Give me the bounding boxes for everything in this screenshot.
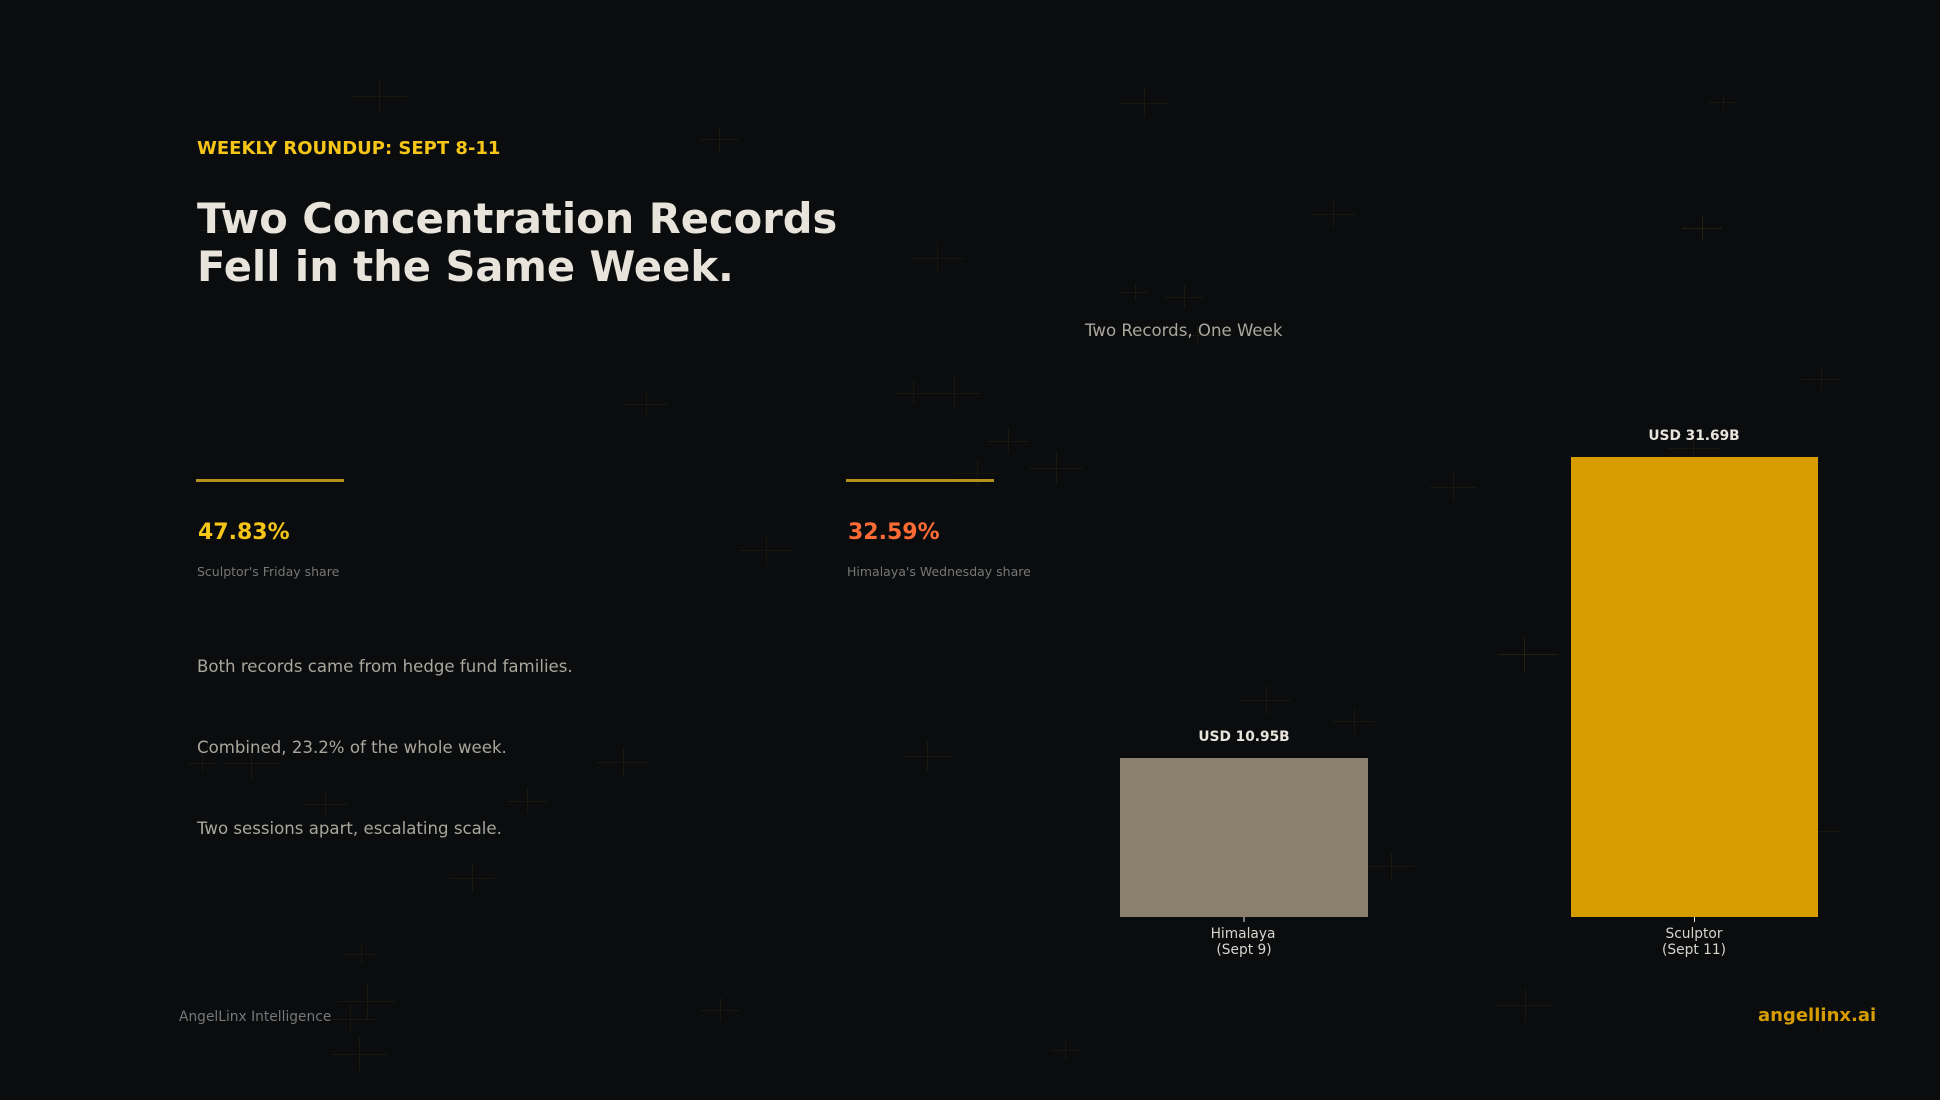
body text xyxy=(196,657,573,838)
stat: Himalaya's Wednesday share: Himalaya's Wednesday share xyxy=(847,564,1031,579)
bar: Himalaya: (Sept 9) xyxy=(1216,942,1272,958)
title xyxy=(197,194,837,291)
bar: Sculptor: Sculptor xyxy=(1665,926,1723,942)
stat: Himalaya's Wednesday share xyxy=(846,479,1031,579)
stat: Sculptor's Friday share xyxy=(196,479,344,579)
bar: Sculptor: (Sept 11) xyxy=(1662,942,1726,958)
title: Fell in the Same Week. xyxy=(197,242,734,291)
stat: Sculptor's Friday share: Sculptor's Friday share xyxy=(197,564,339,579)
bar: Himalaya xyxy=(1120,729,1368,958)
stat: Sculptor's Friday share: 47.83% xyxy=(198,520,290,545)
body text: Combined, 23.2% of the whole week. xyxy=(197,738,507,757)
bar: Himalaya: Himalaya xyxy=(1211,926,1275,942)
stat: Himalaya's Wednesday share: 32.59% xyxy=(848,520,940,545)
chart title: Two Records, One Week xyxy=(1085,321,1282,340)
bar: Sculptor: USD 31.69B xyxy=(1648,428,1740,444)
body text: Two sessions apart, escalating scale. xyxy=(197,819,502,838)
bar: Himalaya: USD 10.95B xyxy=(1198,729,1290,745)
body text: Both records came from hedge fund families. xyxy=(197,657,573,676)
footer: source: AngelLinx Intelligence xyxy=(179,1009,331,1025)
bar chart xyxy=(1120,428,1818,958)
bar: Sculptor xyxy=(1571,428,1818,958)
title: Two Concentration Records xyxy=(197,194,837,243)
footer: site: angellinx.ai xyxy=(1758,1005,1876,1026)
eyebrow heading: WEEKLY ROUNDUP: SEPT 8-11 xyxy=(197,138,500,159)
